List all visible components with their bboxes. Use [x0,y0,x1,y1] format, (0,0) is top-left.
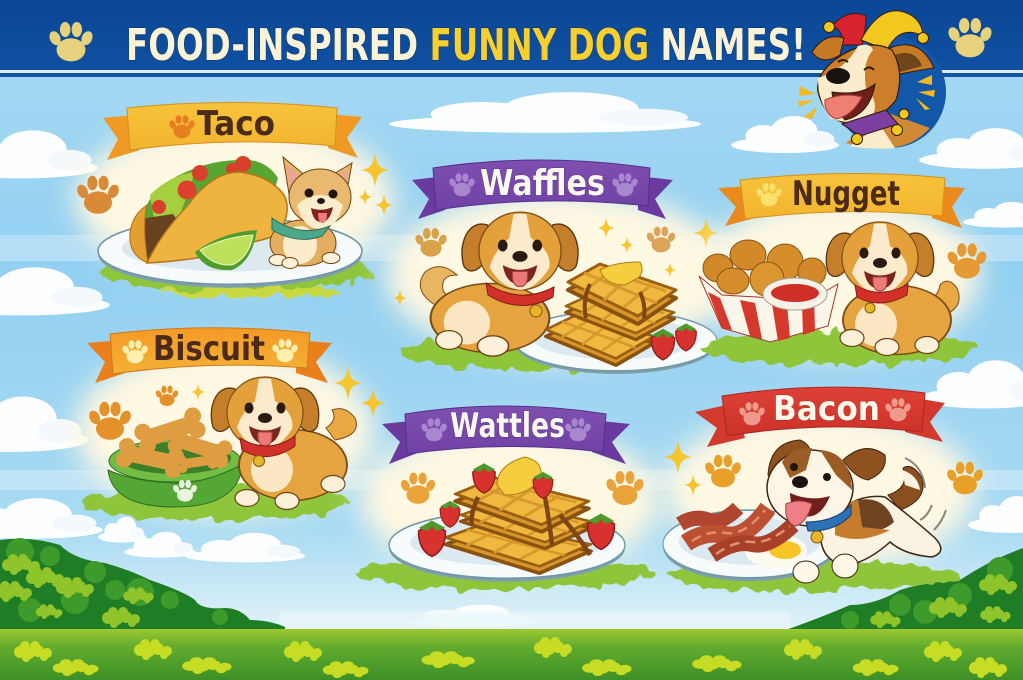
waffle stack [418,457,614,573]
sparkles [358,153,393,216]
clouds [0,92,1023,632]
plate [389,512,625,582]
burst lines [798,75,935,119]
label: Waffles [480,163,605,204]
hedge right [780,548,1023,636]
icon: paw [121,340,149,363]
icon: paw [172,480,198,502]
icon: paw [271,339,299,362]
icon: paw [87,402,133,440]
taco [130,156,287,270]
banner: Taco [103,102,362,160]
ears [812,37,844,60]
icon: paw [611,173,639,196]
icon: right paw [946,18,994,57]
dog: golden [420,212,578,356]
banner: Waffles [412,160,673,219]
dog: terrier [767,440,946,583]
panel: Biscuit [75,328,385,520]
label: Bacon [773,389,880,429]
icon: left paw [47,22,95,61]
banner: Biscuit [87,328,332,383]
icon: paw [399,473,437,504]
icon: paw [945,462,985,494]
banner: Bacon [695,387,945,447]
panel: Wattles [355,406,660,589]
banner: Nugget [718,173,965,228]
plate [515,311,717,374]
panel: Waffles [385,160,735,374]
title: FOOD-INSPIRED FUNNY DOG NAMES! [126,20,806,71]
icon: jester dog mascot [798,11,946,149]
icon: paw [946,243,988,279]
jester hat [832,14,866,45]
icon: paw [605,471,645,505]
icon: paw [884,398,912,421]
label: Wattles [450,406,565,446]
icon: paw [420,418,448,441]
icon: paw [168,115,196,138]
waffle stack [546,262,696,365]
icon: paw [645,227,677,252]
bowl with biscuits [108,405,243,507]
icon: paw [448,173,476,196]
label: Biscuit [153,329,265,369]
icon: paw [703,455,743,487]
plate [663,510,837,581]
icon: paw [564,418,592,441]
panel: Taco [75,102,395,297]
lime [195,230,257,270]
label: Nugget [792,174,900,214]
head [818,45,900,123]
icon: paw [414,228,448,257]
dog: corgi [269,157,352,268]
label: Taco [197,104,275,144]
banner: Wattles [382,406,630,464]
collar [842,110,898,136]
nuggets box [699,240,838,342]
icon: paw [75,176,121,214]
grass field [0,629,1023,680]
dog: golden [826,222,959,356]
icon: paw [738,402,766,425]
bacon strips and egg [680,508,807,568]
icon: paw [755,183,783,206]
hedge left [0,538,285,636]
header banner [0,0,1023,77]
plate [98,218,362,288]
dog: golden [211,377,356,510]
panel: Nugget [699,173,988,365]
panel: Bacon [663,387,985,591]
